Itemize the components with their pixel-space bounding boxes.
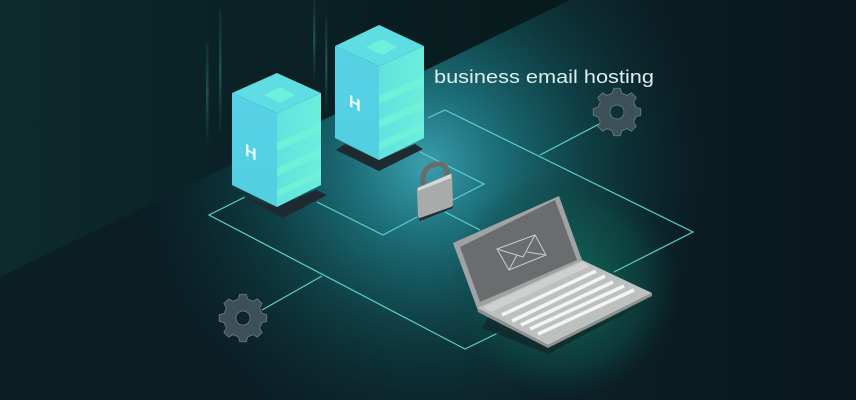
icon: gear lower left <box>219 294 267 342</box>
server right shadow <box>336 144 423 171</box>
laptop keyboard <box>502 271 634 334</box>
padlock shackle <box>423 164 447 186</box>
wall light streaks <box>206 0 328 143</box>
server left top panel <box>264 87 295 103</box>
laptop screen <box>453 196 582 308</box>
icon: laptop <box>453 196 652 354</box>
server left side face <box>232 93 277 207</box>
back wall <box>0 0 570 277</box>
laptop shadow <box>482 300 650 354</box>
icon: gear upper right <box>593 88 641 136</box>
server right top <box>335 25 424 66</box>
server left top <box>232 73 321 113</box>
server left <box>232 73 327 218</box>
padlock shadow <box>418 204 453 221</box>
icon: padlock <box>417 164 453 221</box>
server right side face <box>335 46 379 160</box>
server left logo: H <box>245 140 257 165</box>
server left front face <box>277 93 321 207</box>
server right front face <box>379 46 424 160</box>
icon: envelope <box>497 235 546 270</box>
server right logo: H <box>349 91 361 116</box>
server right <box>335 25 424 171</box>
padlock highlight <box>418 174 451 191</box>
padlock body <box>417 174 453 218</box>
laptop base <box>477 260 652 345</box>
server right top panel <box>366 39 397 55</box>
laptop hinge strip <box>483 262 590 312</box>
server left shadow <box>243 190 327 218</box>
circuit lines <box>209 110 693 349</box>
heading: business email hosting <box>434 66 654 87</box>
